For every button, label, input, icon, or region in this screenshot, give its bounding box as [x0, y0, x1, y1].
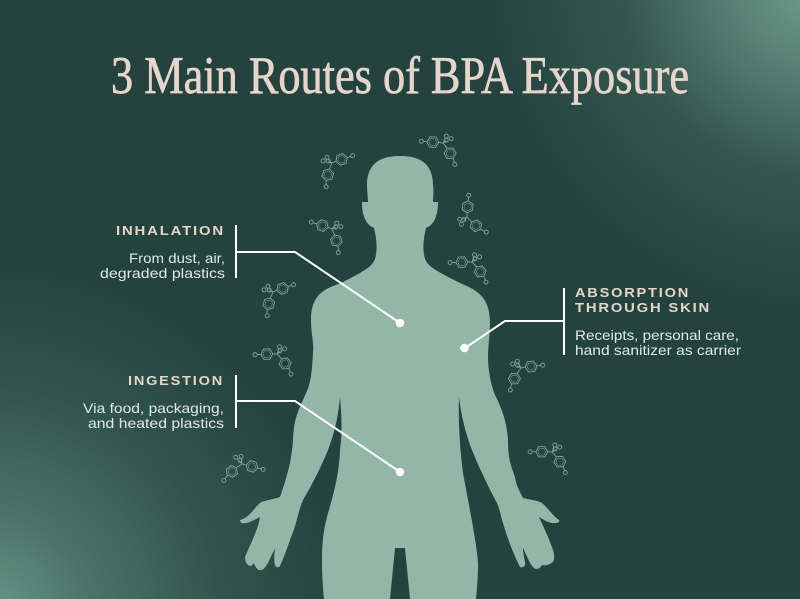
callout: ingestion: [83, 373, 404, 476]
inhalation leader line: [236, 225, 404, 327]
absorption heading: THROUGH SKIN: [575, 300, 711, 315]
absorption heading: ABSORPTION: [575, 285, 690, 300]
inhalation description: [100, 250, 225, 281]
inhalation description: degraded plastics: [100, 265, 225, 281]
human body silhouette: [240, 156, 559, 599]
ingestion description: [83, 400, 224, 431]
ingestion description: and heated plastics: [88, 415, 224, 431]
absorption heading: [575, 285, 711, 315]
absorption description: hand sanitizer as carrier: [575, 342, 741, 358]
absorption leader line: [460, 288, 564, 355]
inhalation description: From dust, air,: [129, 250, 225, 266]
title: 3 Main Routes of BPA Exposure: [111, 47, 689, 105]
callout: absorption through skin: [460, 285, 741, 358]
ingestion description: Via food, packaging,: [83, 400, 224, 416]
callout: inhalation: [100, 223, 404, 327]
ingestion heading: INGESTION: [128, 373, 224, 388]
inhalation heading: INHALATION: [116, 223, 225, 238]
ingestion leader line: [236, 375, 404, 476]
absorption description: [575, 327, 741, 358]
molecule icons: [221, 133, 568, 496]
absorption description: Receipts, personal care,: [575, 327, 739, 343]
